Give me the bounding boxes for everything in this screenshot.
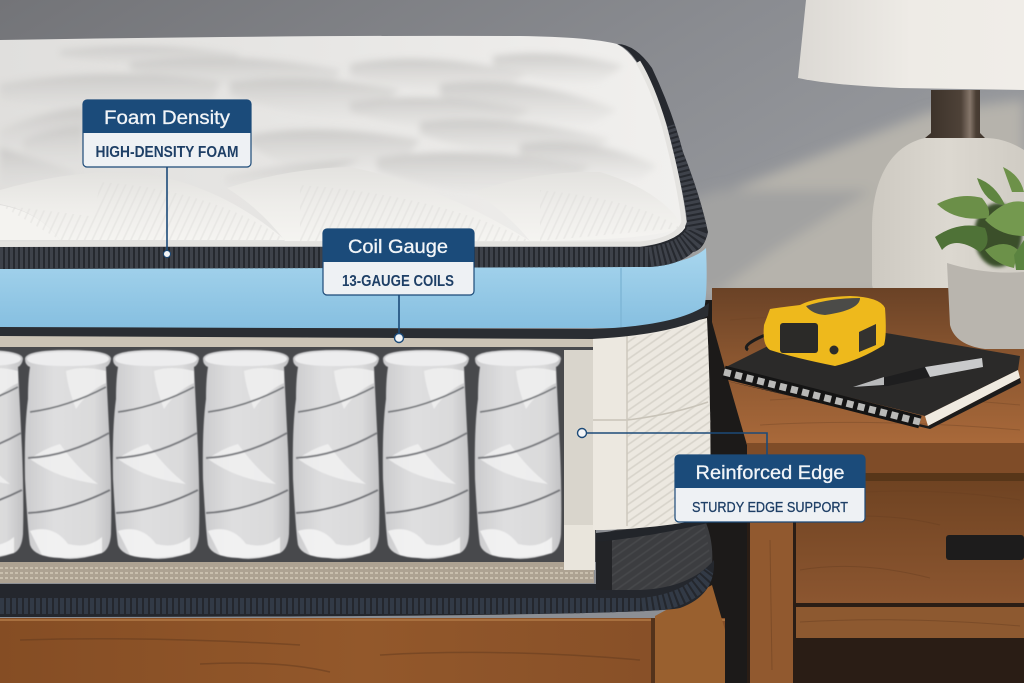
- coil chamber: [0, 346, 596, 562]
- reinforced edge panel: [593, 318, 711, 530]
- callout body: [323, 229, 474, 295]
- spiral binding: [724, 372, 920, 422]
- heading: Coil Gauge: [348, 237, 448, 258]
- quilt shaded cells: [0, 46, 657, 195]
- heading: Foam Density: [104, 108, 231, 129]
- dome texture: [0, 182, 680, 241]
- callout body: [675, 455, 865, 522]
- front quilt domes: [0, 172, 285, 240]
- upper fabric band: [0, 336, 594, 347]
- heading: Reinforced Edge: [696, 463, 844, 484]
- nightstand: [700, 288, 1024, 683]
- leader line: [398, 295, 400, 338]
- nightstand top: [712, 288, 1024, 445]
- background wall: [0, 0, 1024, 300]
- lower drawer: [796, 607, 1024, 638]
- leader line: [586, 433, 767, 455]
- callout header: [675, 455, 865, 488]
- post: [750, 522, 793, 683]
- table under mattress: [0, 585, 725, 683]
- piping: [0, 62, 684, 244]
- lamp: [798, 0, 1024, 327]
- lamp neck: [925, 90, 985, 138]
- callout: foam density: [83, 100, 251, 258]
- mattress: [0, 36, 714, 617]
- callout: coil gauge: [323, 229, 474, 342]
- tape body: [764, 296, 886, 366]
- nightstand dark side: [700, 300, 760, 683]
- notebook pages: [925, 370, 1020, 426]
- pen: [853, 358, 983, 387]
- top binding: [0, 44, 708, 269]
- bottom binding: [0, 560, 714, 617]
- drawer: [796, 481, 1024, 603]
- callout header: [323, 229, 474, 262]
- drawer handle: [946, 535, 1024, 560]
- lower fabric band: [0, 562, 594, 583]
- callout header: [83, 100, 251, 133]
- leader dot: [164, 250, 170, 258]
- leader dot: [578, 428, 586, 438]
- lamp shade: [798, 0, 1024, 90]
- subheading: HIGH-DENSITY FOAM: [96, 144, 238, 161]
- side base: [596, 518, 712, 595]
- foam layer: [0, 248, 707, 328]
- lamp foot: [877, 296, 960, 327]
- leader dot: [394, 334, 404, 342]
- tape measure: [746, 296, 886, 366]
- foam lower binding: [0, 303, 709, 339]
- top front edge: [747, 443, 1024, 473]
- subheading: 13-GAUGE COILS: [342, 273, 454, 290]
- notebook: [722, 332, 1021, 429]
- callout: reinforced edge: [578, 428, 865, 522]
- plant: [935, 167, 1024, 270]
- leader line: [166, 167, 168, 254]
- lamp base: [872, 138, 1024, 316]
- wall light patch: [690, 100, 1024, 295]
- subheading: STURDY EDGE SUPPORT: [692, 499, 848, 516]
- callout body: [83, 100, 251, 167]
- notebook cover: [726, 332, 1020, 416]
- inner edge foam: [564, 350, 595, 526]
- plant pot: [947, 263, 1024, 349]
- pocket coils: [0, 350, 561, 559]
- tape buttons: [780, 323, 818, 353]
- quilted top: [0, 36, 685, 247]
